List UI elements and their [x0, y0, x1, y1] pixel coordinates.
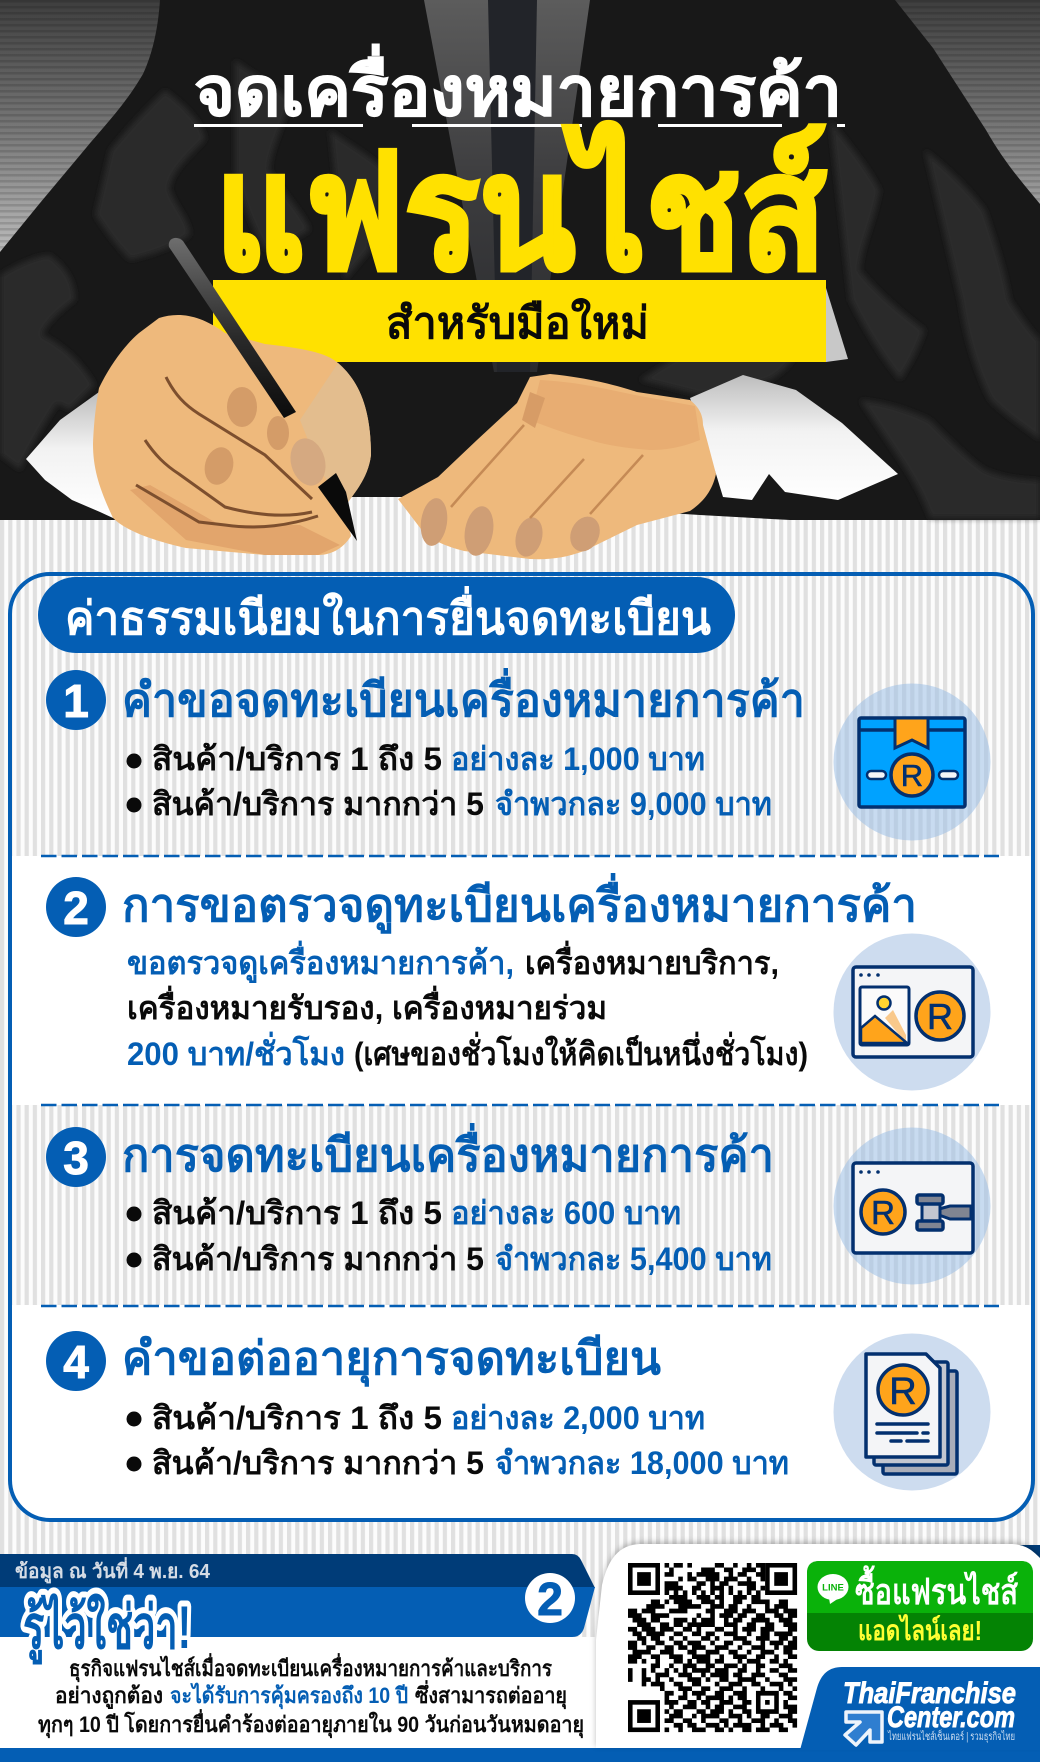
number 3 badge: 3 [63, 1132, 89, 1184]
number 4 badge: 4 [63, 1336, 89, 1388]
footer: did-you-know banner [0, 1554, 1040, 1762]
hand holding pen [93, 238, 371, 555]
row 2 [46, 873, 990, 1090]
icon: picture and registered mark window: R [927, 996, 953, 1037]
footer body text: จะได้รับการคุ้มครองถึง 10 ปี [170, 1682, 408, 1710]
shirt front [424, 0, 590, 372]
icon: box with registered mark [834, 684, 990, 840]
LINE button: แอดไลน์เลย! [858, 1614, 982, 1646]
row 1 line 2: จำพวกละ 9,000 บาท [495, 786, 772, 822]
row 4 line 2: จำพวกละ 18,000 บาท [495, 1445, 789, 1481]
row 3 line 1 [126, 1195, 681, 1231]
row 1 line 2 [126, 786, 772, 822]
white card [596, 1544, 1040, 1748]
title line 1: จดเครื่องหมายการค้า [194, 43, 842, 130]
footer body text: ซึ่งสามารถต่ออายุ [415, 1679, 567, 1710]
number 2 badge: 2 [63, 882, 89, 934]
row 1 [46, 668, 990, 840]
footer body text: อย่างถูกต้อง [55, 1683, 163, 1710]
row 3 [46, 1123, 990, 1284]
number 2 badge [46, 877, 106, 937]
dashed divider [41, 1305, 999, 1307]
hero backdrop gradient [0, 0, 1040, 270]
row 4 line 1 [126, 1400, 705, 1436]
row 4 line 1: สินค้า/บริการ 1 ถึง 5 [152, 1400, 442, 1436]
icon: stacked documents with registered mark: R [889, 1371, 917, 1413]
icon: LINE bubble: LINE [822, 1582, 844, 1594]
row 3 line 1: อย่างละ 600 บาท [451, 1195, 681, 1231]
banner blue band [0, 1587, 595, 1637]
panel border [10, 574, 1033, 1520]
heading pill: ค่าธรรมเนียมในการยื่นจดทะเบียน [65, 586, 712, 644]
left-resting hand [398, 374, 716, 560]
row 4 line 1: อย่างละ 2,000 บาท [451, 1400, 705, 1436]
panel white rows [12, 856, 1031, 1520]
row 2 body: (เศษของชั่วโมงให้คิดเป็นหนึ่งชั่วโมง) [354, 1031, 808, 1072]
row 3 line 2: สินค้า/บริการ มากกว่า 5 [152, 1241, 484, 1277]
icon: LINE bubble [818, 1574, 848, 1604]
yellow subtitle banner: สำหรับมือใหม่ [386, 297, 649, 348]
title line 2: แฟรนไชส์ [215, 122, 826, 302]
row 1 line 1: สินค้า/บริการ 1 ถึง 5 [152, 741, 442, 777]
icon: picture and registered mark window [834, 934, 990, 1090]
row 2 body: เครื่องหมายบริการ, [525, 940, 779, 981]
row 4 heading: คำขอต่ออายุการจดทะเบียน [122, 1332, 662, 1387]
yellow subtitle banner [213, 280, 826, 362]
pen nib [318, 473, 357, 541]
row 4 line 2 [126, 1445, 789, 1481]
pen barrel [169, 238, 296, 418]
page number badge [525, 1573, 575, 1625]
number 3 badge [46, 1127, 106, 1187]
light wedge beside banner [826, 288, 848, 362]
dark corner [1015, 1545, 1040, 1570]
icon: box with registered mark: R [901, 758, 923, 793]
row 2 body: 200 บาท/ชั่วโมง [127, 1031, 345, 1072]
row 2 body: เครื่องหมายรับรอง, เครื่องหมายร่วม [127, 985, 607, 1026]
footer body text: ธุรกิจแฟรนไชส์เมื่อจดทะเบียนเครื่องหมายการค้าและบริการ [69, 1652, 552, 1683]
row 3 heading: การจดทะเบียนเครื่องหมายการค้า [122, 1123, 774, 1181]
necktie [488, 0, 537, 372]
row 3 line 2 [126, 1241, 772, 1277]
dashed divider [41, 1104, 999, 1106]
LINE button [807, 1561, 1033, 1651]
number 1 badge: 1 [63, 675, 89, 727]
hero: suit illustration [0, 0, 1040, 520]
bottom blue bar [0, 1748, 1040, 1762]
row 2 body: ขอตรวจดูเครื่องหมายการค้า, [127, 940, 514, 984]
row 3 line 1: สินค้า/บริการ 1 ถึง 5 [152, 1195, 442, 1231]
row 2 body [127, 940, 808, 1072]
row 2 heading: การขอตรวจดูทะเบียนเครื่องหมายการค้า [122, 873, 917, 934]
row 3 line 2: จำพวกละ 5,400 บาท [495, 1241, 772, 1277]
icon: gavel and registered mark window [834, 1128, 990, 1284]
row 1 line 2: สินค้า/บริการ มากกว่า 5 [152, 786, 484, 822]
row 1 heading: คำขอจดทะเบียนเครื่องหมายการค้า [122, 668, 805, 726]
row 1 line 1 [126, 741, 705, 777]
data date: ข้อมูล ณ วันที่ 4 พ.ย. 64 [15, 1556, 211, 1585]
panel: registration fees [10, 574, 1033, 1520]
number 4 badge [46, 1331, 106, 1391]
shirt cuffs [26, 375, 898, 518]
row 1 line 1: อย่างละ 1,000 บาท [451, 741, 705, 777]
row 4 [46, 1331, 990, 1490]
icon: gavel and registered mark window: R [871, 1194, 895, 1231]
jacket [0, 0, 1040, 520]
jacket wrinkles [0, 60, 1040, 518]
QR code [628, 1565, 797, 1730]
logo: ThaiFranchise Center [800, 1667, 1040, 1750]
heading pill [38, 577, 735, 653]
banner dark top [0, 1554, 595, 1588]
white footer field [0, 1637, 610, 1749]
row 4 line 2: สินค้า/บริการ มากกว่า 5 [152, 1445, 484, 1481]
footer: contact card [596, 1544, 1040, 1750]
page number badge: 2 [537, 1573, 563, 1625]
icon: stacked documents with registered mark [834, 1334, 990, 1490]
icon: arrow [845, 1712, 882, 1745]
number 1 badge [46, 670, 106, 730]
heading: did you know: รู้ไว้ใช่ว่า! [23, 1592, 191, 1665]
footer body text: ทุกๆ 10 ปี โดยการยื่นคำร้องต่ออายุภายใน 90 วันก่อนวันหมดอายุ [38, 1708, 584, 1739]
footer body text [38, 1652, 584, 1739]
dashed divider [41, 855, 999, 857]
